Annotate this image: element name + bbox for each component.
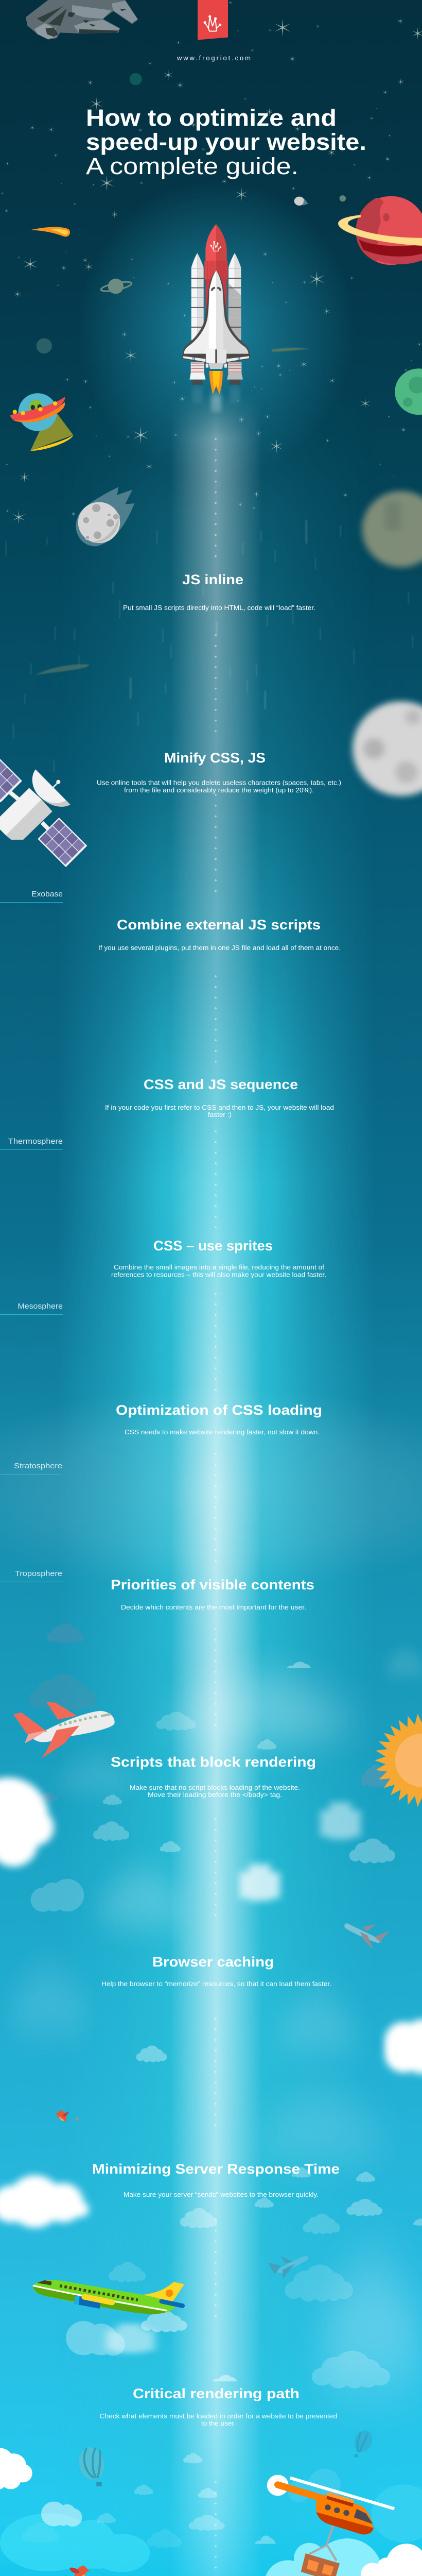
heading: JS inline: Put small JS scripts directly into HTML, code will “load” faster. — [123, 604, 315, 612]
heading: Combine external JS scripts: If you use several plugins, put them in one JS file and load all of them at once. — [98, 944, 341, 952]
title: speed-up your website. — [86, 129, 366, 155]
faint blue airplane — [268, 2256, 308, 2279]
rocket glow — [77, 180, 355, 479]
small space objects — [37, 73, 346, 353]
clouds: mid sky — [66, 2036, 422, 2463]
small birds — [55, 2110, 79, 2122]
heading: Minify CSS, JS — [97, 750, 341, 794]
heading: Combine external JS scripts — [98, 917, 341, 952]
altitude label: Exobase: Exobase — [31, 890, 63, 899]
heading: Minify CSS, JS: from the file and considerably reduce the weight (up to 20%). — [124, 787, 314, 794]
altitude label: Troposphere — [0, 1569, 63, 1582]
heading: CSS – use sprites: references to resources – this will also make your website load faster. — [111, 1272, 326, 1279]
bird — [52, 2566, 90, 2576]
heading: Critical rendering path — [100, 2386, 337, 2427]
heading: Browser caching: Browser caching — [152, 1954, 274, 1970]
blurred moon — [353, 701, 422, 796]
faint streak comet — [35, 664, 89, 675]
falcon spaceship — [26, 0, 138, 40]
rocket — [182, 224, 250, 412]
heading: CSS – use sprites — [111, 1238, 326, 1279]
heading: JS inline — [123, 572, 315, 612]
heading: Optimization of CSS loading: Optimization of CSS loading — [116, 1402, 322, 1418]
blurred cloud top-right of caching — [385, 2019, 422, 2061]
title — [86, 105, 366, 179]
dotted flight path — [215, 439, 217, 2576]
helicopter — [267, 2475, 394, 2576]
heading: Priorities of visible contents — [111, 1577, 314, 1611]
altitude label: Stratosphere: Stratosphere — [14, 1462, 62, 1470]
logo ribbon — [198, 0, 228, 40]
heading: Priorities of visible contents: Priorities of visible contents — [111, 1577, 314, 1592]
heading: CSS – use sprites: Combine the small images into a single file, reducing the amount of — [114, 1264, 325, 1271]
heading: Optimization of CSS loading: CSS needs to make website rendering faster, not slow it down. — [125, 1429, 320, 1436]
heading: Minimizing Server Response Time: Minimizing Server Response Time — [92, 2161, 340, 2177]
green airplane — [33, 2280, 184, 2314]
blurred white cloud lower left — [0, 2175, 89, 2228]
website url: www.frogriot.com — [177, 54, 251, 62]
red airplane — [13, 1702, 115, 1758]
satellite — [0, 753, 87, 867]
altitude label: Exobase — [0, 890, 63, 903]
heading: CSS and JS sequence: CSS and JS sequence — [144, 1077, 298, 1092]
star field — [1, 1, 422, 529]
hot air balloon right — [351, 2428, 375, 2457]
heading: Browser caching: Help the browser to “memorize” resources, so that it can load them faster. — [101, 1980, 331, 1988]
heading: Priorities of visible contents: Decide which contents are the most important for the user. — [121, 1604, 306, 1611]
altitude label: Mesosphere — [0, 1302, 63, 1315]
title: A complete guide. — [86, 153, 298, 179]
comet — [30, 227, 70, 237]
heading: Critical rendering path: Critical rendering path — [133, 2386, 300, 2401]
title: How to optimize and — [86, 105, 337, 131]
sun — [375, 1714, 422, 1807]
altitude label: Thermosphere — [0, 1137, 63, 1150]
heading: Minimizing Server Response Time: Make sure your server “sends” websites to the browser quickly. — [124, 2191, 319, 2198]
blurred planet — [362, 491, 422, 567]
hot air balloon left — [76, 2445, 107, 2486]
ufo with alien — [10, 393, 73, 451]
heading: Scripts that block rendering: Move their loading before the </body> tag. — [148, 1791, 282, 1799]
small cloud near troposphere — [47, 1623, 84, 1643]
altitude label: Mesosphere: Mesosphere — [17, 1302, 63, 1311]
clouds: upper sky — [9, 1649, 422, 2062]
blurred star streaks — [6, 520, 413, 772]
green planet — [395, 368, 422, 415]
heading: Minify CSS, JS: Minify CSS, JS — [164, 750, 266, 766]
altitude label: Stratosphere — [0, 1462, 62, 1475]
meteor — [76, 487, 135, 546]
heading: Minimizing Server Response Time — [92, 2161, 340, 2198]
clouds: lower sky — [0, 2448, 422, 2576]
heading: Optimization of CSS loading — [116, 1402, 322, 1436]
small grey airplane — [344, 1923, 390, 1950]
heading: Combine external JS scripts: Combine external JS scripts — [117, 917, 321, 933]
heading: Critical rendering path: Check what elements must be loaded in order for a website to be presented — [100, 2413, 337, 2420]
altitude label: Troposphere: Troposphere — [15, 1569, 62, 1578]
heading: Scripts that block rendering: Scripts that block rendering — [111, 1754, 316, 1770]
heading: Critical rendering path: to the user. — [201, 2420, 236, 2427]
heading: Browser caching — [101, 1954, 331, 1988]
heading: Scripts that block rendering: Make sure that no script blocks loading of the website. — [130, 1784, 300, 1791]
light beam: core — [170, 361, 262, 2576]
blurred white cloud left — [0, 1777, 54, 1867]
red ringed planet — [338, 196, 422, 265]
heading: CSS – use sprites: CSS – use sprites — [153, 1238, 273, 1253]
heading: CSS and JS sequence: faster :) — [208, 1111, 232, 1118]
light beam: wide glow — [69, 432, 363, 2208]
heading: Scripts that block rendering — [111, 1754, 316, 1799]
light haze band — [0, 1386, 422, 1592]
altitude label: Thermosphere: Thermosphere — [8, 1137, 63, 1146]
heading: CSS and JS sequence — [105, 1077, 334, 1118]
heading: CSS and JS sequence: If in your code you first refer to CSS and then to JS, your website will load — [105, 1104, 334, 1111]
heading: JS inline: JS inline — [182, 572, 243, 587]
heading: Minify CSS, JS: Use online tools that will help you delete useless characters (spaces, tabs, etc.) — [97, 779, 341, 786]
